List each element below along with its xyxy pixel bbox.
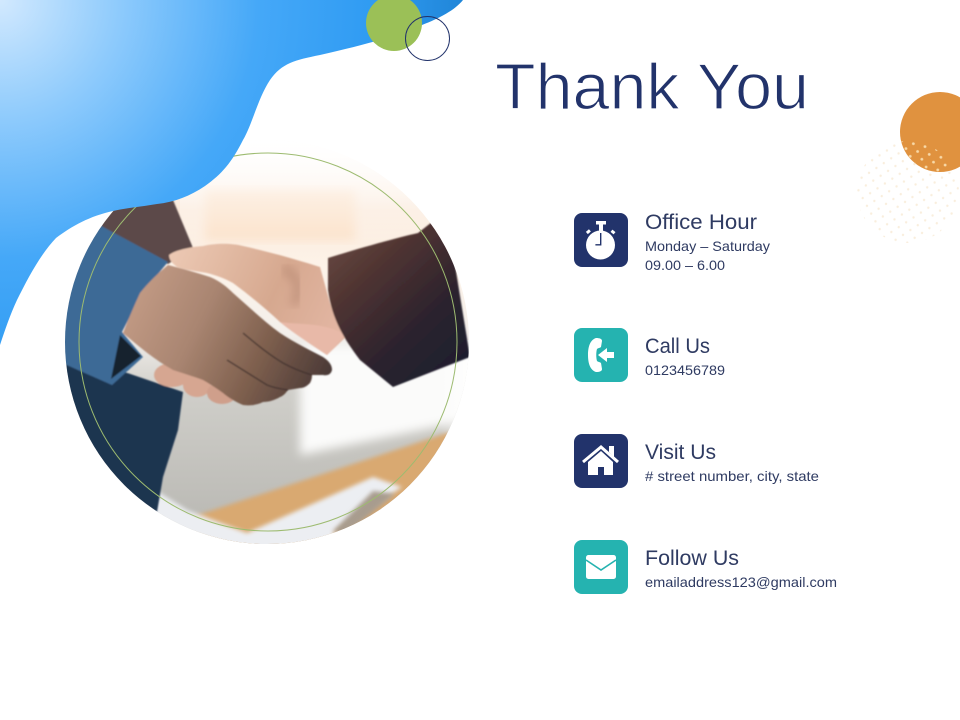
- right hand and thumb: [169, 244, 348, 355]
- left hand: [123, 265, 332, 405]
- blue wave shape: [0, 0, 463, 345]
- text: address: # street number, city, state: [645, 468, 819, 484]
- heading: visit us: Visit Us: [645, 441, 716, 464]
- icon: envelope: [574, 540, 628, 594]
- green circle: [366, 0, 422, 51]
- icon: house: [574, 434, 628, 488]
- text: office times: 09.00 – 6.00: [645, 257, 725, 273]
- text: email address: emailaddress123@gmail.com: [645, 574, 837, 590]
- icon: phone: [574, 328, 628, 382]
- heading: follow us: Follow Us: [645, 547, 739, 570]
- contact item: follow us: [574, 540, 837, 594]
- lower fingers: [154, 363, 190, 387]
- dotted circle decoration: [857, 141, 959, 243]
- contact item: call us: [574, 328, 725, 382]
- title: Thank You: [495, 50, 809, 123]
- heading: call us: Call Us: [645, 335, 710, 358]
- text: phone number: 0123456789: [645, 362, 725, 378]
- photo outline ring: [79, 153, 457, 531]
- contact item: office hour: [574, 211, 770, 273]
- orange circle: [900, 92, 960, 172]
- icon: stopwatch: [574, 213, 628, 267]
- handshake photo: [65, 176, 469, 544]
- text: office days: Monday – Saturday: [645, 238, 770, 254]
- contact item: visit us: [574, 434, 819, 488]
- right person's sleeve: [328, 222, 470, 387]
- left person's jacket: [66, 364, 184, 512]
- heading: office hour: Office Hour: [645, 211, 757, 234]
- navy outline circle: [406, 16, 450, 60]
